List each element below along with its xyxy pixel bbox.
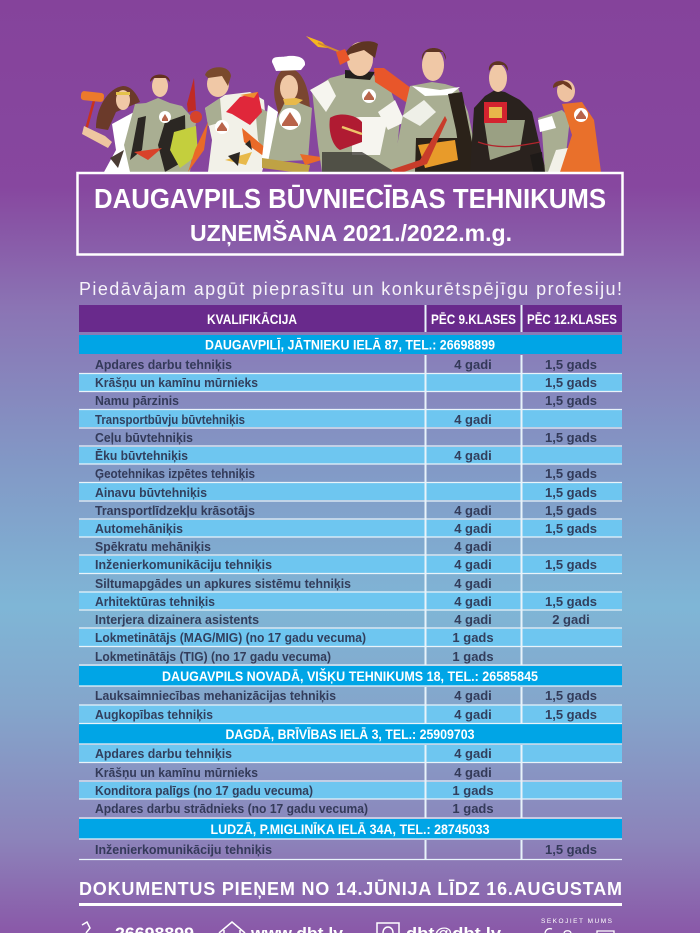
rows: Daugavpils: 4 gadi bbox=[454, 357, 492, 372]
subtitle: admission year: UZŅEMŠANA 2021./2022.m.g. bbox=[190, 219, 512, 246]
table header: PĒC 12.KLASES bbox=[527, 311, 617, 327]
grid lines bbox=[79, 305, 622, 860]
rows: Daugavpils: Automehāniķis bbox=[95, 521, 183, 536]
rows: Dagda: 4 gadi bbox=[454, 765, 492, 780]
rows: Daugavpils novads: 4 gadi bbox=[454, 688, 492, 703]
figure: woman with white chef hat bbox=[262, 56, 328, 174]
rows: Daugavpils: 4 gadi bbox=[454, 503, 492, 518]
table header: PĒC 9.KLASES bbox=[431, 311, 516, 327]
rows: Dagda: 4 gadi bbox=[454, 746, 492, 761]
figure: man with drill bbox=[124, 74, 202, 172]
rows: Daugavpils: 1,5 gads bbox=[545, 466, 597, 481]
section: Ludza: LUDZĀ, P.MIGLINĪKA IELĀ 34A, TEL.: 28745033 bbox=[210, 821, 490, 837]
rows: Daugavpils: Lokmetinātājs (MAG/MIG) (no 17 gadu vecuma) bbox=[95, 630, 366, 645]
alternating row fills bbox=[79, 374, 622, 799]
contacts footer bbox=[82, 918, 614, 933]
title: school name: DAUGAVPILS BŪVNIECĪBAS TEHNIKUMS bbox=[94, 183, 606, 214]
rows: Dagda bbox=[95, 746, 494, 816]
section bars bbox=[79, 335, 622, 839]
rows: Daugavpils: Krāšņu un kamīnu mūrnieks bbox=[95, 375, 258, 390]
rows: Dagda: Apdares darbu tehniķis bbox=[95, 746, 232, 761]
rows: Daugavpils: 4 gadi bbox=[454, 557, 492, 572]
rows: Daugavpils: 1,5 gads bbox=[545, 557, 597, 572]
rows: Dagda: Konditora palīgs (no 17 gadu vecuma) bbox=[95, 783, 313, 798]
rows: Dagda: 1 gads bbox=[452, 801, 494, 816]
rows: Daugavpils: 1,5 gads bbox=[545, 375, 597, 390]
rows: Daugavpils: Lokmetinātājs (TIG) (no 17 gadu vecuma) bbox=[95, 649, 331, 664]
figure: man with orange tool belt bbox=[390, 48, 480, 174]
follow us label: SEKOJIET MUMS bbox=[541, 918, 613, 925]
rows: Daugavpils: Transportlīdzekļu krāsotājs bbox=[95, 503, 255, 518]
rows: Daugavpils: 4 gadi bbox=[454, 539, 492, 554]
rows: Daugavpils: 1,5 gads bbox=[545, 485, 597, 500]
icon: phone bbox=[82, 922, 90, 933]
deadline banner: DOKUMENTUS PIEŅEM NO 14.JŪNIJA LĪDZ 16.AUGUSTAM bbox=[79, 879, 622, 899]
rows: Ludza: 1,5 gads bbox=[545, 842, 597, 857]
rows: Daugavpils: Transportbūvju būvtehniķis bbox=[95, 412, 245, 427]
icon: email bbox=[377, 923, 399, 933]
rows: Ludza bbox=[95, 842, 597, 857]
section: Daugavpils: DAUGAVPILĪ, JĀTNIEKU IELĀ 87, TEL.: 26698899 bbox=[205, 336, 495, 352]
rows: Daugavpils: 1,5 gads bbox=[545, 503, 597, 518]
rows: Daugavpils: 4 gadi bbox=[454, 412, 492, 427]
section: Daugavpils novads: DAUGAVPILS NOVADĀ, VIŠĶU TEHNIKUMS 18, TEL.: 26585845 bbox=[162, 667, 538, 684]
rows: Daugavpils: 1 gads bbox=[452, 630, 494, 645]
rows: Daugavpils novads: Lauksaimniecības mehanizācijas tehniķis bbox=[95, 688, 336, 703]
rows: Daugavpils: Arhitektūras tehniķis bbox=[95, 594, 215, 609]
rows: Daugavpils: 1,5 gads bbox=[545, 521, 597, 536]
title box bbox=[78, 173, 622, 254]
rows: Daugavpils: 4 gadi bbox=[454, 448, 492, 463]
rows: Daugavpils: Apdares darbu tehniķis bbox=[95, 357, 232, 372]
rows: Daugavpils novads bbox=[95, 688, 597, 722]
rows: Daugavpils: 4 gadi bbox=[454, 612, 492, 627]
rows: Daugavpils bbox=[95, 357, 597, 664]
rows: Daugavpils novads: Augkopības tehniķis bbox=[95, 707, 213, 722]
rows: Daugavpils: 1,5 gads bbox=[545, 594, 597, 609]
rows: Daugavpils: 1 gads bbox=[452, 649, 494, 664]
figure: armoured man with helmet and rocket torch bbox=[306, 36, 427, 172]
rows: Dagda: Krāšņu un kamīnu mūrnieks bbox=[95, 765, 258, 780]
rows: Daugavpils: 1,5 gads bbox=[545, 357, 597, 372]
table header: KVALIFIKĀCIJA bbox=[207, 311, 297, 327]
rows: Daugavpils: Ēku būvtehniķis bbox=[95, 448, 188, 463]
rows: Daugavpils novads: 4 gadi bbox=[454, 707, 492, 722]
figure: woman with paint roller bbox=[81, 86, 142, 172]
rows: Daugavpils: 2 gadi bbox=[552, 612, 590, 627]
rows: Daugavpils: Ainavu būvtehniķis bbox=[95, 485, 207, 500]
rows: Daugavpils: 4 gadi bbox=[454, 594, 492, 609]
rows: Ludza: Inženierkomunikāciju tehniķis bbox=[95, 842, 272, 857]
rows: Daugavpils: Siltumapgādes un apkures sistēmu tehniķis bbox=[95, 576, 351, 591]
rows: Daugavpils: 1,5 gads bbox=[545, 430, 597, 445]
rows: Daugavpils: Namu pārzinis bbox=[95, 393, 179, 408]
rows: Daugavpils: Interjera dizainera asistents bbox=[95, 612, 259, 627]
table header bbox=[79, 305, 622, 332]
rows: Daugavpils: Inženierkomunikāciju tehniķis bbox=[95, 557, 272, 572]
icons: social bbox=[545, 929, 614, 933]
rows: Daugavpils novads: 1,5 gads bbox=[545, 688, 597, 703]
figure: man in black suit with red square emblem bbox=[470, 61, 546, 174]
rows: Daugavpils: Ģeotehnikas izpētes tehniķis bbox=[95, 466, 255, 481]
rows: Daugavpils: Ceļu būvtehniķis bbox=[95, 430, 193, 445]
rows: Daugavpils: 1,5 gads bbox=[545, 393, 597, 408]
figure: man with orange cape, back turned bbox=[538, 80, 601, 172]
rows: Daugavpils: Spēkratu mehāniķis bbox=[95, 539, 211, 554]
rows: Daugavpils novads: 1,5 gads bbox=[545, 707, 597, 722]
icon: house bbox=[219, 922, 245, 933]
rows: Dagda: 1 gads bbox=[452, 783, 494, 798]
rows: Daugavpils: 4 gadi bbox=[454, 576, 492, 591]
illustration: team of construction superheroes bbox=[81, 36, 601, 174]
figure: man with red cape bundle bbox=[188, 67, 268, 172]
table: qualifications bbox=[79, 305, 622, 860]
rows: Daugavpils: 4 gadi bbox=[454, 521, 492, 536]
tagline: Piedāvājam apgūt pieprasītu un konkurētspējīgu profesiju! bbox=[79, 279, 622, 299]
section: Dagda: DAGDĀ, BRĪVĪBAS IELĀ 3, TEL.: 25909703 bbox=[226, 726, 475, 742]
rows: Dagda: Apdares darbu strādnieks (no 17 gadu vecuma) bbox=[95, 801, 368, 816]
